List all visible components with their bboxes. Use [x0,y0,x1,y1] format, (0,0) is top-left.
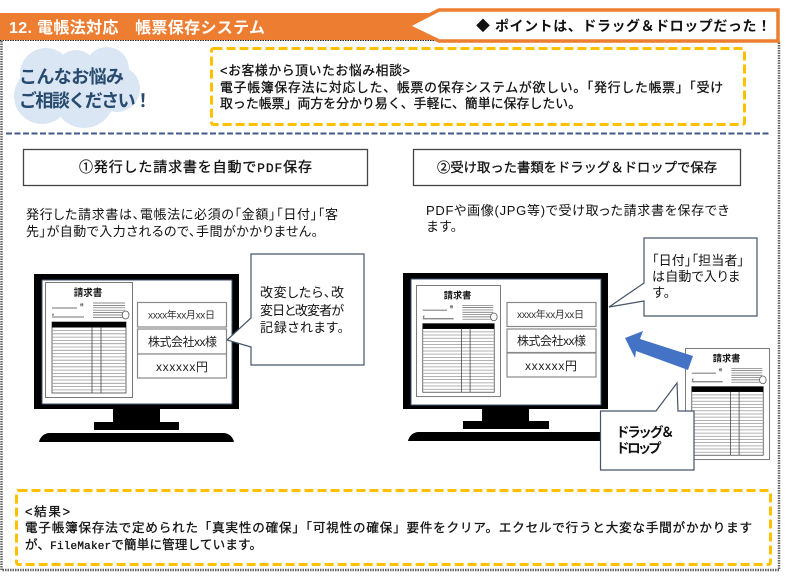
result box [16,490,770,564]
heading: section 2: ②受け取った書類をドラッグ＆ドロップで保存 [437,160,717,175]
text: section 2 description [426,203,729,234]
text: section 1 description: 発行した請求書は、電帳法に必須の「金額」「日付」「客 [26,207,338,222]
invoice document: ¥ [52,313,54,317]
consultation box [212,48,744,124]
text: section 2 description: ます。 [426,219,464,234]
invoice document: dropped file: ¥ [692,378,694,382]
consultation box: 電子帳簿保存法に対応した、帳票の保存システムが欲しい。「発行した帳票」「受け [220,80,723,95]
invoice document: ¥ [423,315,425,319]
invoice document: dropped file [685,348,770,460]
callout: auto fill: す。 [652,285,677,300]
amount field: xxxxxx円 [156,360,208,374]
callout: change log: 記録されます。 [260,320,344,335]
monitor 2 [403,273,608,441]
customer field [507,329,596,352]
amount field: xxxxxx円 [525,359,577,373]
text: section 1 description: 先」が自動で入力されるので、手間がかかりません。 [26,224,318,239]
consultation box: 取った帳票」両方を分かり易く、手軽に、簡単に保存したい。 [220,96,581,111]
callout: change log: 改変したら、改 [260,285,344,300]
key point banner: ◆ ポイントは、ドラッグ＆ドロップだった！ [476,18,771,34]
amount field [138,354,226,378]
cloud heading: ご相談ください！ [19,90,152,111]
invoice document [416,285,501,397]
text: section 2 description: PDFや画像(JPG等)で受け取った請求書を保存でき [426,203,729,218]
date field: xxxx年xx月xx日 [148,308,215,322]
arrow: drag direction [625,331,693,370]
customer field: 株式会社xx様 [148,334,217,349]
text: section 1 description [26,207,338,239]
callout: drag and drop: ドラッグ＆ [617,424,673,440]
date field: xxxx年xx月xx日 [517,308,584,321]
heading: section 1 [24,150,368,186]
date field [507,302,596,326]
callout: drag and drop: ドロップ [617,441,662,456]
customer field: 株式会社xx様 [517,333,586,348]
callout: auto fill [609,238,757,316]
invoice document: 様 [80,302,84,307]
callout: change log: 変日と改変者が [260,303,344,318]
key point banner [408,10,778,41]
invoice document: 様 [450,304,454,309]
invoice document [46,282,132,398]
cloud heading [14,47,152,128]
heading: section 1: ①発行した請求書を自動でPDF保存 [79,159,312,176]
invoice document: dropped file: 請求書 [713,353,740,364]
title bar [0,13,445,40]
amount field [507,353,596,377]
callout: auto fill: は自動で入りま [652,269,740,284]
callout: drag and drop [600,383,694,470]
invoice document: dropped file: 様 [719,367,723,372]
callout: auto fill: 「日付」「担当者」 [652,253,744,268]
cloud heading: こんなお悩み [19,67,124,87]
consultation box: <お客様から頂いたお悩み相談> [220,63,410,78]
invoice document: 請求書 [74,287,103,299]
result box: 電子帳簿保存法で定められた「真実性の確保」「可視性の確保」要件をクリア。エクセルで行うと大変な手間がかかります [25,520,752,535]
result box: が、FileMakerで簡単に管理しています。 [25,537,262,553]
result box: <結果> [25,505,70,519]
monitor 1 [34,274,239,442]
callout: change log [227,254,364,365]
invoice document: 請求書 [444,290,471,301]
title bar: 12. 電帳法対応 帳票保存システム [9,18,265,37]
heading: section 2 [414,150,740,186]
customer field [138,329,226,354]
date field [138,302,226,327]
